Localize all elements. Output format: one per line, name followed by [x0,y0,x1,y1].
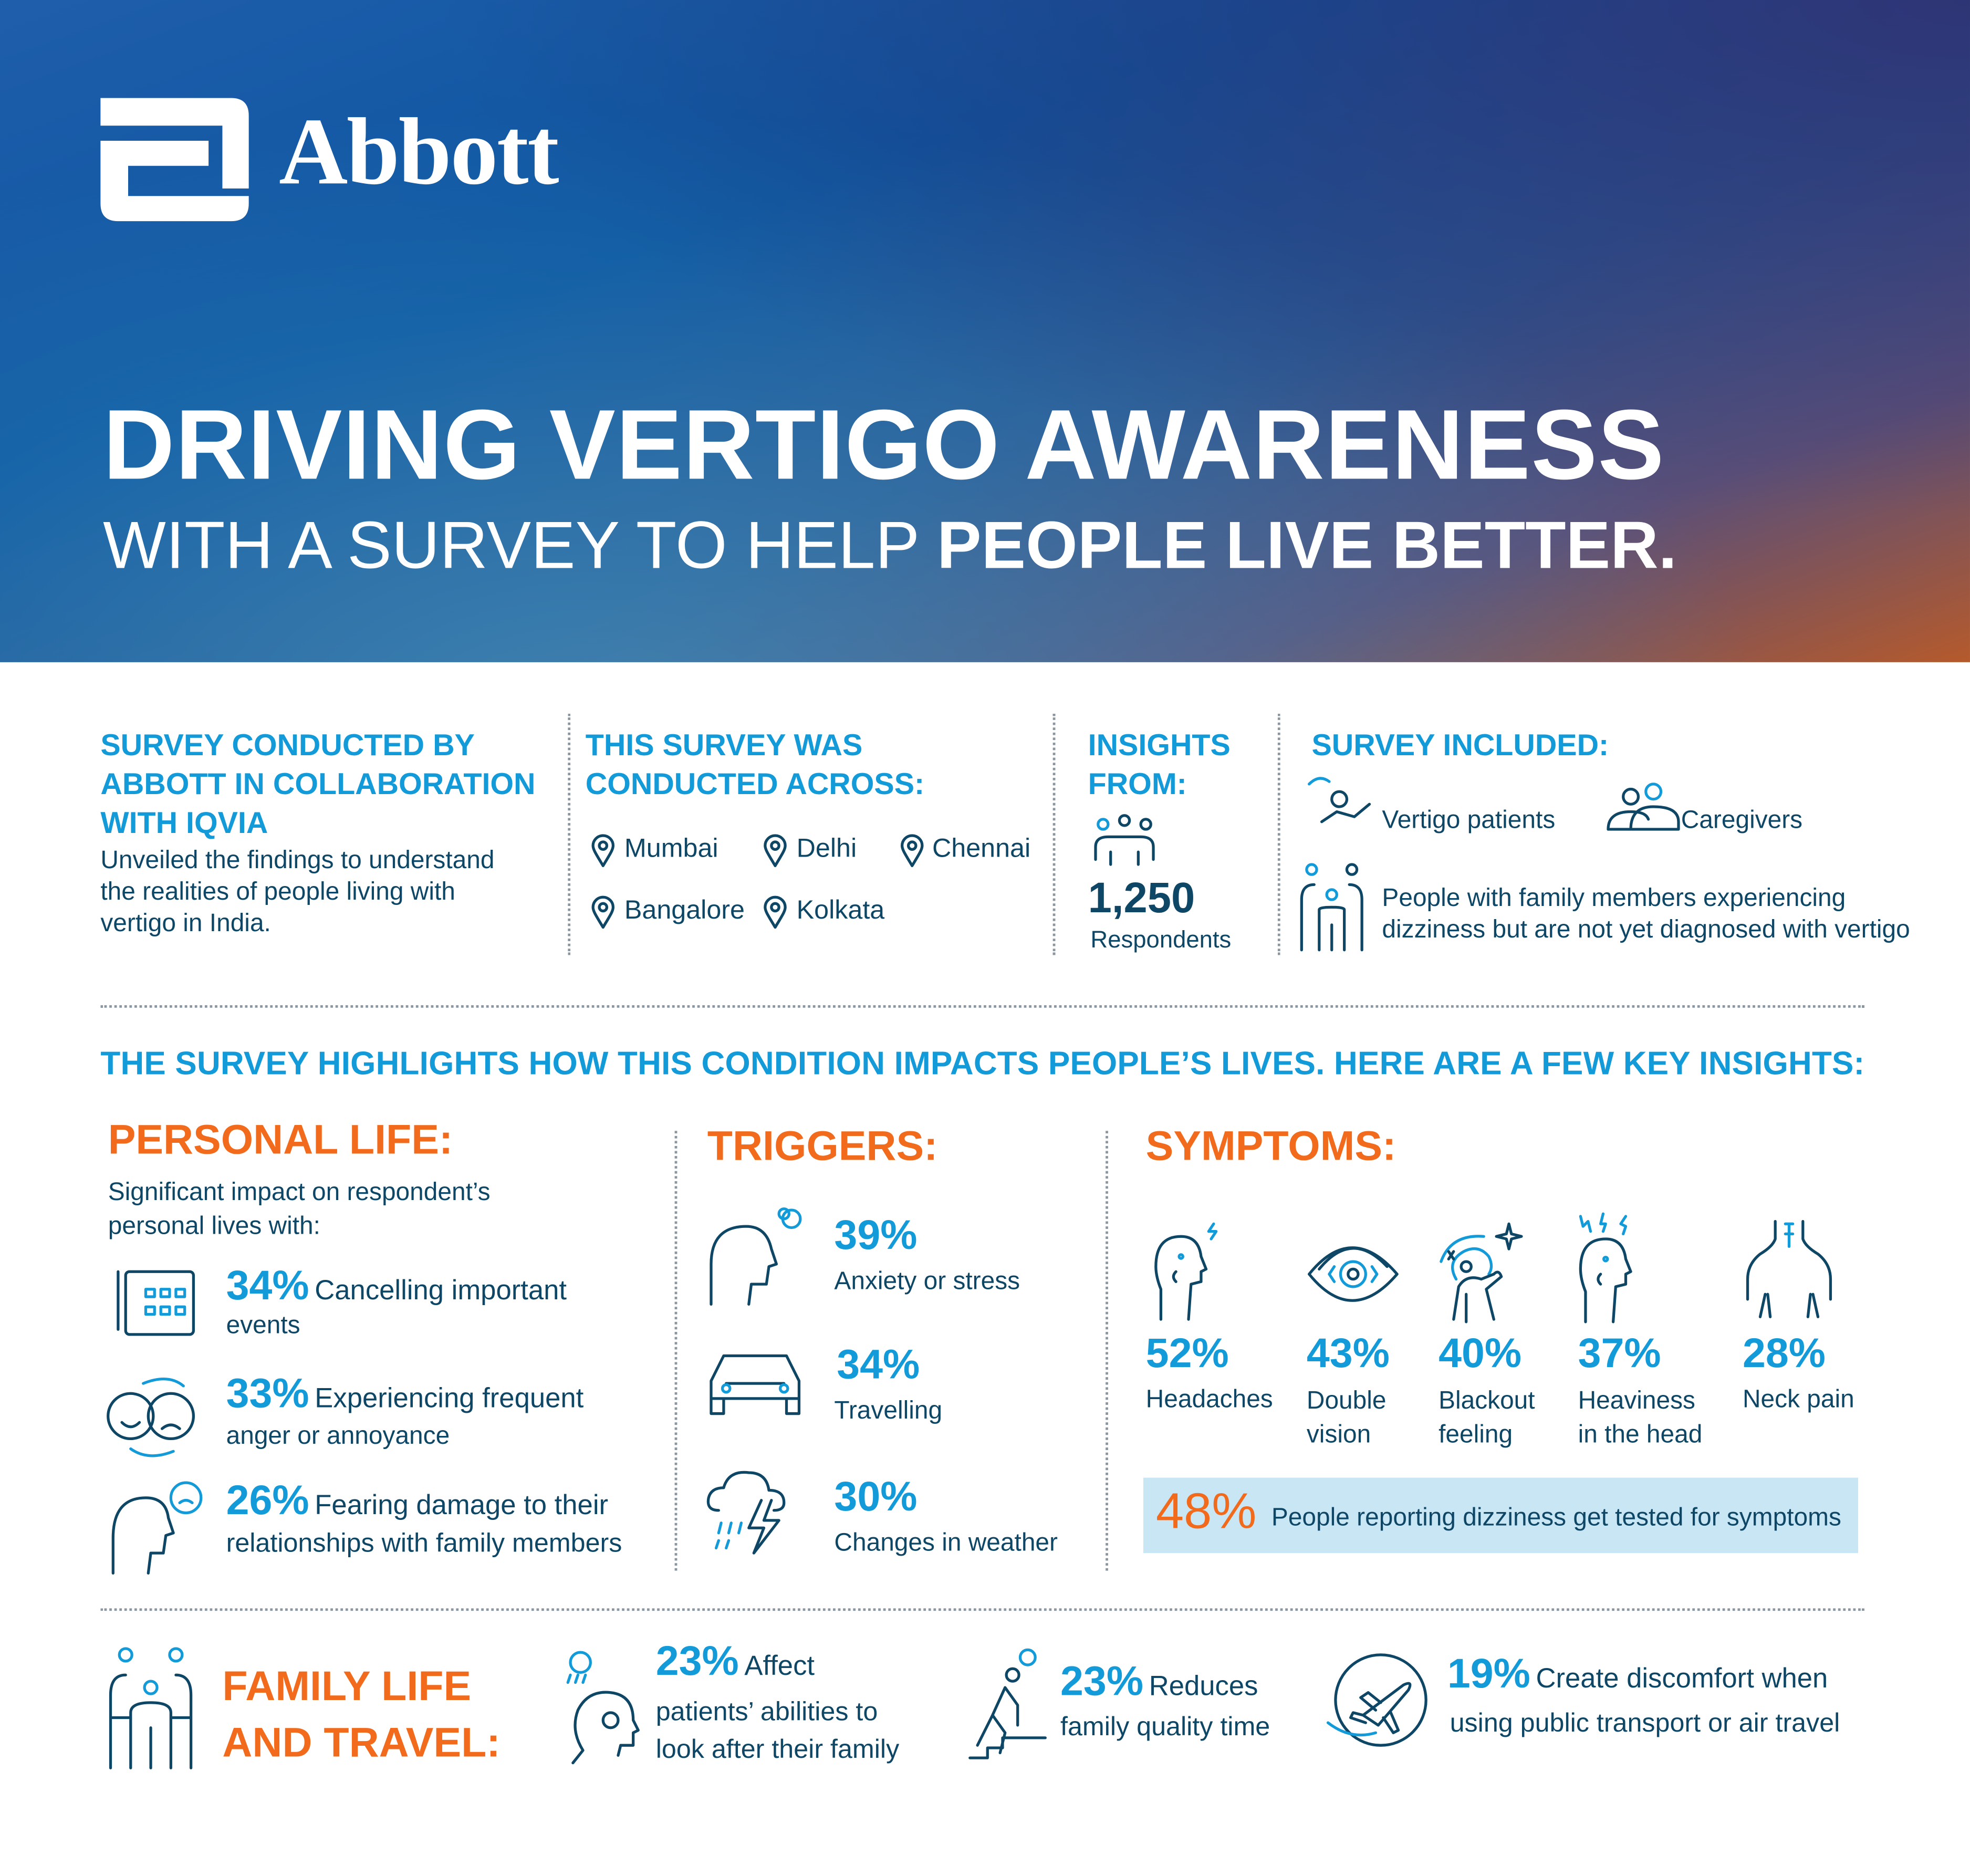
heading [1088,729,1231,801]
callout: 48%: 48% [1156,1484,1256,1539]
item: look after family: look after their family [656,1735,899,1764]
item: relationships [106,1480,659,1575]
symptom: double vision: Double [1307,1387,1387,1415]
symptom: blackout [1439,1219,1583,1457]
icon: caregivers [1607,783,1680,831]
symptom: blackout: 40% [1439,1329,1521,1376]
heading: FROM: [1088,768,1187,801]
panel: survey conducted by [100,729,536,937]
item: anger: 33% Experiencing frequent [226,1370,583,1416]
icon: angry head [106,1480,206,1576]
item: anxiety [704,1201,1080,1302]
callout: 48%: People reporting dizziness get tested for symptoms [1271,1504,1841,1531]
subtext: personal lives with: [108,1213,320,1240]
panel: personal life [100,1116,653,1581]
city list [591,834,1030,929]
item: weather: 30% [834,1473,917,1519]
subtext [108,1176,491,1244]
logo text: Abbott [279,99,558,205]
symptom: headaches [1146,1219,1290,1420]
heading: WITH IQVIA [100,807,268,841]
heading: PERSONAL LIFE: [108,1116,453,1162]
heading: FAMILY LIFE [222,1662,471,1709]
panel: family life and travel [100,1640,1872,1778]
panel: triggers [704,1116,1093,1568]
symptom: heaviness: in the head [1578,1421,1702,1449]
icon: head stress [706,1206,809,1307]
city list: Delhi [797,835,857,863]
panel: survey included: Caregivers [1681,807,1802,835]
item: cancelling events [113,1264,641,1342]
item: look after family: 23% Affect [656,1637,815,1684]
symptom: double vision: 43% [1307,1329,1390,1376]
item: public transport [1326,1640,1865,1765]
heading: CONDUCTED ACROSS: [586,768,924,801]
panel: symptoms [1137,1116,1878,1556]
symptom: headaches: Headaches [1146,1386,1273,1414]
panel: survey included [1300,729,1910,952]
item: anxiety: 39% [834,1211,917,1258]
item: anxiety: Anxiety or stress [834,1268,1020,1296]
item: family quality time [967,1640,1307,1765]
item: cancelling events: events [226,1312,300,1339]
panel: insights from: Respondents [1090,927,1231,954]
heading [100,729,536,841]
item: family quality time: family quality time [1060,1713,1270,1742]
heading: SURVEY INCLUDED: [1311,729,1609,763]
symptom: heaviness [1578,1214,1729,1453]
body text: Unveiled the findings to understand [100,847,494,874]
icon: abbott mark [100,98,249,222]
heading: INSIGHTS [1088,729,1231,763]
symptom: heaviness: 37% [1578,1329,1661,1376]
item: weather: Changes in weather [834,1529,1058,1557]
stat: respondents: 1,250 [1088,874,1195,922]
city list: Kolkata [797,896,884,925]
symptom: neck pain: Neck pain [1743,1386,1854,1414]
item: anger [103,1373,656,1461]
item: relationships: 26% Fearing damage to their [226,1476,608,1523]
city list: Bangalore [624,896,745,925]
symptom: double vision: vision [1307,1421,1371,1449]
item: look after family: patients’ abilities to [656,1697,878,1726]
panel: cities [586,729,1030,929]
symptom: double vision [1307,1219,1445,1457]
item: travelling: Travelling [834,1397,942,1425]
item: relationships: relationships with family members [226,1529,622,1558]
body text [100,847,494,937]
symptom: neck pain [1740,1219,1878,1420]
symptom: headaches: 52% [1146,1329,1229,1376]
heading: SYMPTOMS: [1146,1122,1396,1169]
heading: TRIGGERS: [707,1122,937,1169]
item: weather [704,1465,1093,1566]
heading: ABBOTT IN COLLABORATION [100,768,536,801]
icon: family [1300,863,1363,952]
icon: storm cloud [706,1465,807,1558]
icon: vertigo patient [1308,777,1371,824]
item: family quality time: 23% Reduces [1060,1658,1258,1704]
body text: the realities of people living with [100,878,455,906]
symptom: blackout: Blackout [1439,1387,1535,1415]
symptom: heaviness: Heaviness [1578,1387,1695,1415]
header background [0,0,1970,662]
text: family members: People with family members experiencing [1382,884,1846,912]
heading [222,1658,501,1770]
callout: 48% [1143,1478,1858,1553]
subtext: Significant impact on respondent’s [108,1179,491,1206]
item: look after family [555,1640,932,1771]
heading: SURVEY CONDUCTED BY [100,729,475,763]
icon: car [706,1348,807,1416]
heading: THIS SURVEY WAS [586,729,862,763]
city list: Mumbai [624,835,718,863]
text: family members: dizziness but are not yet diagnosed with vertigo [1382,916,1910,944]
symptom: blackout: feeling [1439,1421,1513,1449]
panel: insights from [1088,729,1231,954]
title: DRIVING VERTIGO AWARENESS [103,388,1665,500]
banner heading: THE SURVEY HIGHLIGHTS HOW THIS CONDITION IMPACTS PEOPLE’S LIVES. HERE ARE A FEW KEY INSIGHTS: [100,1047,1864,1082]
logo [100,98,559,222]
city list: Chennai [932,835,1030,863]
icon: family [103,1645,199,1768]
heading: AND TRAVEL: [222,1719,501,1765]
icon: group [1094,814,1155,866]
subtitle: WITH A SURVEY TO HELP PEOPLE LIVE BETTER. [103,509,1677,583]
symptom: neck pain: 28% [1743,1329,1826,1376]
item: cancelling events: 34% Cancelling important [226,1262,567,1308]
text: family members [1382,884,1910,944]
icon: faces [106,1373,211,1461]
item: public transport: 19% Create discomfort when [1447,1650,1828,1696]
item: travelling [704,1336,1080,1436]
item: public transport: using public transport or air travel [1450,1709,1840,1738]
item: anger: anger or annoyance [226,1422,450,1450]
body text: vertigo in India. [100,910,271,937]
icon: calendar [118,1269,196,1337]
panel: survey included: Vertigo patients [1382,807,1555,835]
item: travelling: 34% [837,1341,920,1387]
heading [586,729,924,801]
